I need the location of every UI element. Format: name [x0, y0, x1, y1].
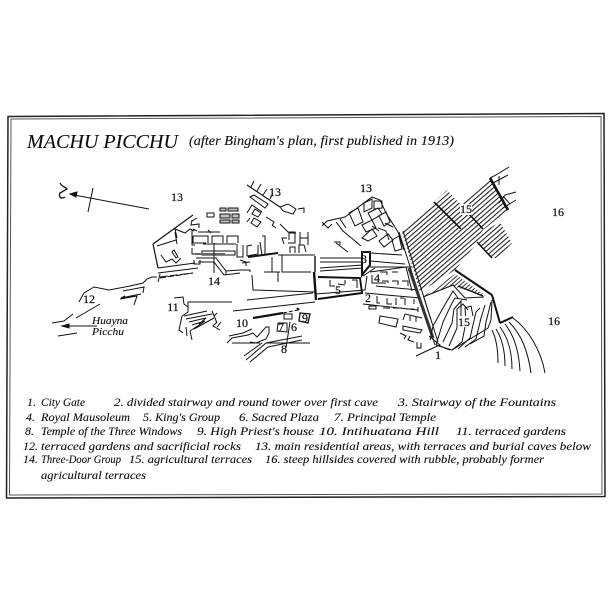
site numbers: 2 [365, 291, 371, 305]
legend line 3: 9. High Priest's house [197, 424, 315, 438]
legend line 1: City Gate [41, 395, 86, 409]
legend line 4: terraced gardens and sacrificial rocks [41, 439, 241, 453]
label: Huayna Picchu: Huayna [91, 316, 128, 327]
site numbers: 13 [360, 181, 372, 195]
legend line 5: 14. [23, 452, 38, 466]
legend line 2: 5. King's Group [143, 410, 220, 424]
legend line 1 [27, 395, 556, 409]
site numbers: 14 [208, 274, 220, 288]
legend line 2: Royal Mausoleum [40, 410, 130, 424]
site numbers: 9 [302, 311, 308, 325]
title [26, 131, 454, 153]
site numbers: 13 [171, 190, 183, 204]
page frame [6, 114, 605, 498]
title: MACHU PICCHU [26, 131, 180, 153]
site numbers [83, 181, 564, 362]
legend line 2: 6. Sacred Plaza [239, 410, 319, 424]
north central residential group [247, 181, 308, 253]
legend line 2: 4. [26, 410, 35, 424]
title: (after Bingham's plan, first published in 1913) [189, 134, 454, 149]
legend line 5: 16. steep hillsides covered with rubble, probably former [265, 452, 544, 466]
legend line 3: Temple of the Three Windows [41, 424, 182, 438]
label: Huayna Picchu: Picchu [91, 327, 124, 338]
legend line 1: 2. divided stairway and round tower over first cave [114, 395, 379, 409]
legend line 1: 1. [27, 395, 36, 409]
agricultural terraces: lower contour lines [423, 285, 492, 350]
main wall to city gate [399, 231, 452, 350]
site numbers: 15 [458, 315, 470, 329]
legend line 3: 11. terraced gardens [456, 424, 566, 438]
legend line 3 [25, 424, 566, 438]
agricultural terraces: upper blocks [402, 178, 512, 296]
legend line 4: 13. main residential areas, with terraces and burial caves below [255, 439, 591, 453]
site numbers: 10 [236, 316, 248, 330]
label: Huayna Picchu [91, 316, 128, 338]
legend line 2: 7. Principal Temple [334, 410, 437, 424]
legend line 3: 10. Intihuatana Hill [319, 424, 440, 438]
house grid [192, 208, 239, 223]
King's Group and stairway [316, 242, 412, 299]
legend [23, 395, 591, 482]
legend line 6: agricultural terraces [41, 468, 146, 482]
legend line 5 [23, 452, 544, 466]
site numbers: 15 [460, 202, 472, 216]
temples and Sacred Plaza [227, 313, 310, 362]
western residential group [153, 215, 199, 282]
site numbers: 16 [548, 314, 560, 328]
site numbers: 7 [278, 320, 284, 334]
legend line 5: 15. agricultural terraces [129, 452, 252, 466]
site numbers: 11 [167, 300, 179, 314]
western hill and Huayna Picchu path [52, 273, 193, 336]
site numbers: 13 [269, 185, 281, 199]
legend line 5: Three-Door Group [41, 452, 121, 466]
thick terrace walls [434, 167, 516, 323]
central terrace walls [174, 253, 316, 318]
site numbers: 5 [335, 283, 341, 297]
terraced gardens 11 [179, 307, 221, 340]
legend line 4 [23, 439, 591, 453]
site numbers: 1 [435, 348, 441, 362]
site numbers: 12 [83, 292, 95, 306]
legend line 1: 3. Stairway of the Fountains [397, 395, 556, 409]
Three-Door Group buildings [192, 230, 265, 275]
site numbers: 4 [374, 271, 380, 285]
Royal Mausoleum and divided stairway blocks [363, 267, 440, 356]
site numbers: 3 [361, 252, 367, 266]
arcs: hillside rubble terraces [492, 318, 545, 373]
north-east residential group [322, 197, 404, 251]
legend line 4: 12. [23, 439, 38, 453]
legend line 3: 8. [25, 424, 34, 438]
icon: north arrow [59, 183, 149, 212]
site numbers: 8 [281, 342, 287, 356]
site numbers: 16 [552, 205, 564, 219]
legend line 2 [26, 410, 437, 424]
site numbers: 6 [291, 320, 297, 334]
